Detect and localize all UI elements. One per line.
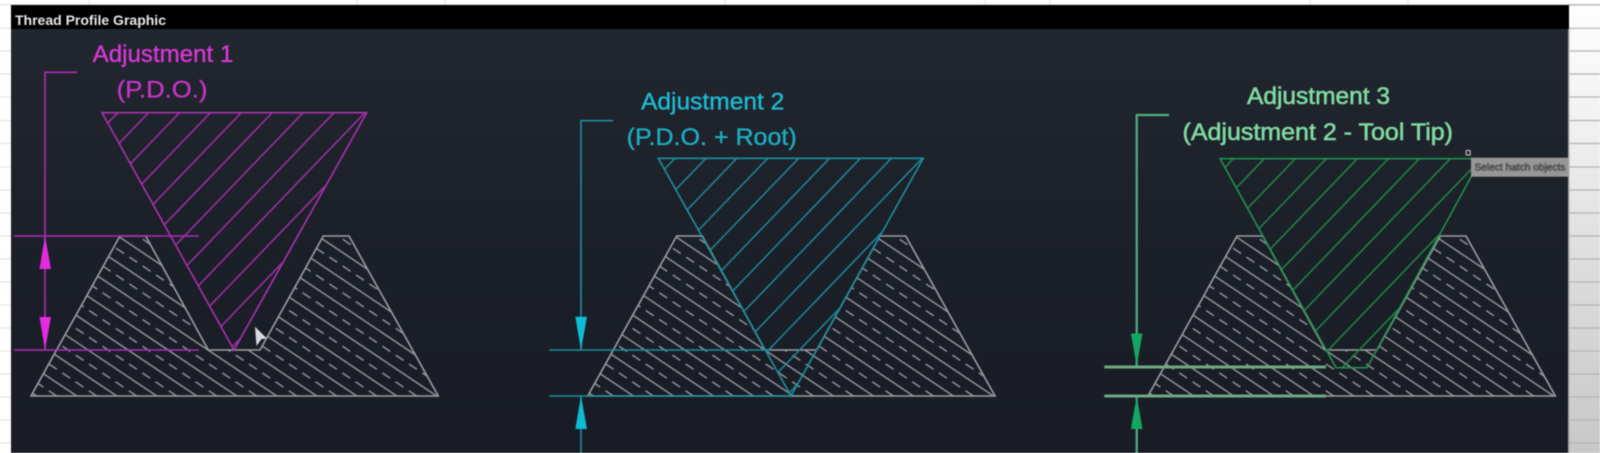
diagram: adjustment 2 <box>548 91 997 453</box>
arrow: down 2 <box>575 317 587 350</box>
label: adjustment 2 minus tool tip: (Adjustment 2 - Tool Tip) <box>1182 119 1453 146</box>
cutting tool triangle 1 <box>100 111 368 352</box>
tooltip: select hatch objects <box>1471 158 1568 177</box>
label: adjustment 1: Adjustment 1 <box>93 41 233 68</box>
label: P.D.O.: (P.D.O.) <box>117 77 207 104</box>
arrow: up 2 <box>575 396 587 429</box>
label: adjustment 2: Adjustment 2 <box>641 88 784 115</box>
title bar: Thread Profile Graphic <box>15 13 166 28</box>
dimension lines 1 <box>14 72 199 350</box>
label: adjustment 3: Adjustment 3 <box>1247 83 1390 110</box>
arrow: down 3 <box>1131 334 1142 366</box>
icon: selection grip <box>1466 150 1470 155</box>
cutting tool triangle 2 <box>656 156 925 398</box>
arrow: down 1 <box>40 317 51 350</box>
extension lines 3 <box>1104 367 1326 396</box>
thread profile 1 <box>0 235 577 396</box>
icon: mouse cursor <box>255 327 267 346</box>
arrow: up 1 <box>40 236 51 269</box>
title bar <box>11 5 1569 29</box>
arrow: up 3 <box>1131 396 1142 429</box>
dimension lines 3 <box>1137 115 1169 453</box>
diagram: adjustment 1 <box>13 44 440 398</box>
cutting tool triangle 3 <box>1218 157 1472 370</box>
thread profile 3 <box>914 235 1600 396</box>
dimension lines 2 <box>549 121 790 453</box>
label: P.D.O. + Root: (P.D.O. + Root) <box>627 124 797 151</box>
thread profile 2 <box>353 235 1133 396</box>
diagram: adjustment 3 <box>1104 86 1557 453</box>
